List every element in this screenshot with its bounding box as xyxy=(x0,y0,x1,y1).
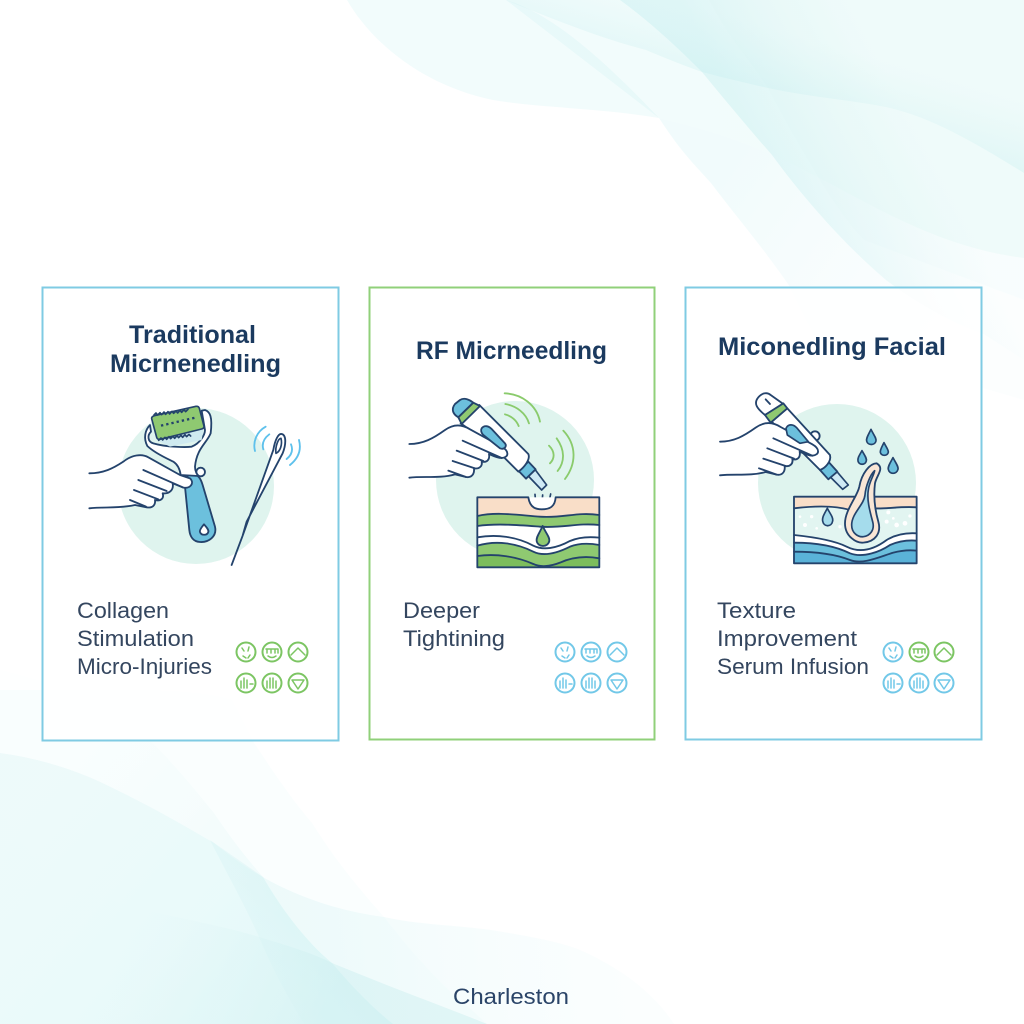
skin outline xyxy=(794,497,917,563)
skin pores xyxy=(799,510,912,530)
panel: microneedling facial xyxy=(686,288,982,740)
illustration backdrop xyxy=(758,404,916,562)
hand xyxy=(409,425,507,478)
skin cross-section xyxy=(477,497,599,567)
roller spikes xyxy=(154,409,191,440)
icon: RF pen and skin xyxy=(409,393,599,567)
benefit list: Texture xyxy=(717,598,796,623)
follicle xyxy=(845,463,880,543)
pen neck xyxy=(820,462,837,479)
panel frame xyxy=(686,288,982,740)
icon: roller in hand xyxy=(89,406,300,565)
icon grid xyxy=(556,642,626,692)
roller drum xyxy=(152,406,204,439)
knob xyxy=(196,468,205,476)
benefit list: Improvement xyxy=(717,626,857,651)
illustration backdrop xyxy=(436,401,594,559)
pen side button xyxy=(810,431,820,441)
RF waves xyxy=(505,393,574,479)
pen band xyxy=(458,403,480,424)
skin cross-section xyxy=(794,497,917,563)
needle marks xyxy=(535,494,551,503)
needle eye xyxy=(276,438,281,453)
finger lines xyxy=(130,470,183,507)
roller dotted line xyxy=(161,417,197,426)
icon grid xyxy=(884,642,954,692)
finger lines xyxy=(759,438,812,475)
panel: RF microneedling xyxy=(370,288,654,740)
follicle inner xyxy=(852,471,875,537)
handle hole xyxy=(200,524,208,535)
finger lines xyxy=(448,441,502,477)
icon: pen, serum and skin xyxy=(720,393,917,563)
roller fork xyxy=(145,410,211,476)
needle xyxy=(232,434,285,565)
pen band xyxy=(765,403,787,423)
pen button xyxy=(481,426,506,449)
panel frame xyxy=(42,288,338,740)
pen tip xyxy=(527,469,547,490)
pen cap xyxy=(756,393,783,415)
droplets xyxy=(823,429,898,526)
pen tip xyxy=(828,469,848,489)
roller handle xyxy=(185,474,215,542)
benefit list: Stimulation xyxy=(77,626,194,651)
panel: traditional microneedling xyxy=(42,288,338,740)
benefit list: Micro-Injuries xyxy=(77,654,212,679)
hand xyxy=(720,423,818,475)
heading: RF Micrneedling xyxy=(416,337,607,365)
footer location label: Charleston xyxy=(453,984,569,1009)
heading: Traditional xyxy=(129,321,256,349)
benefit list: Tightining xyxy=(403,626,505,651)
cap mark xyxy=(766,399,770,404)
pen cap xyxy=(453,399,473,417)
drum shadow xyxy=(157,429,203,447)
illustration backdrop xyxy=(118,408,274,564)
benefit list: Collagen xyxy=(77,598,169,623)
skin outline xyxy=(477,497,599,567)
pen body xyxy=(772,408,830,470)
panel frame xyxy=(370,288,654,740)
vibration arcs xyxy=(254,427,300,465)
benefit list: Serum Infusion xyxy=(717,654,869,679)
pen button xyxy=(786,425,808,443)
heading: Micrnenedling xyxy=(110,350,281,378)
droplet xyxy=(537,526,549,546)
icon grid xyxy=(236,642,308,692)
benefit list: Deeper xyxy=(403,598,480,623)
pen neck xyxy=(518,462,536,479)
hand xyxy=(89,455,192,508)
pen body xyxy=(461,405,529,472)
heading: Miconedling Facial xyxy=(718,333,946,361)
